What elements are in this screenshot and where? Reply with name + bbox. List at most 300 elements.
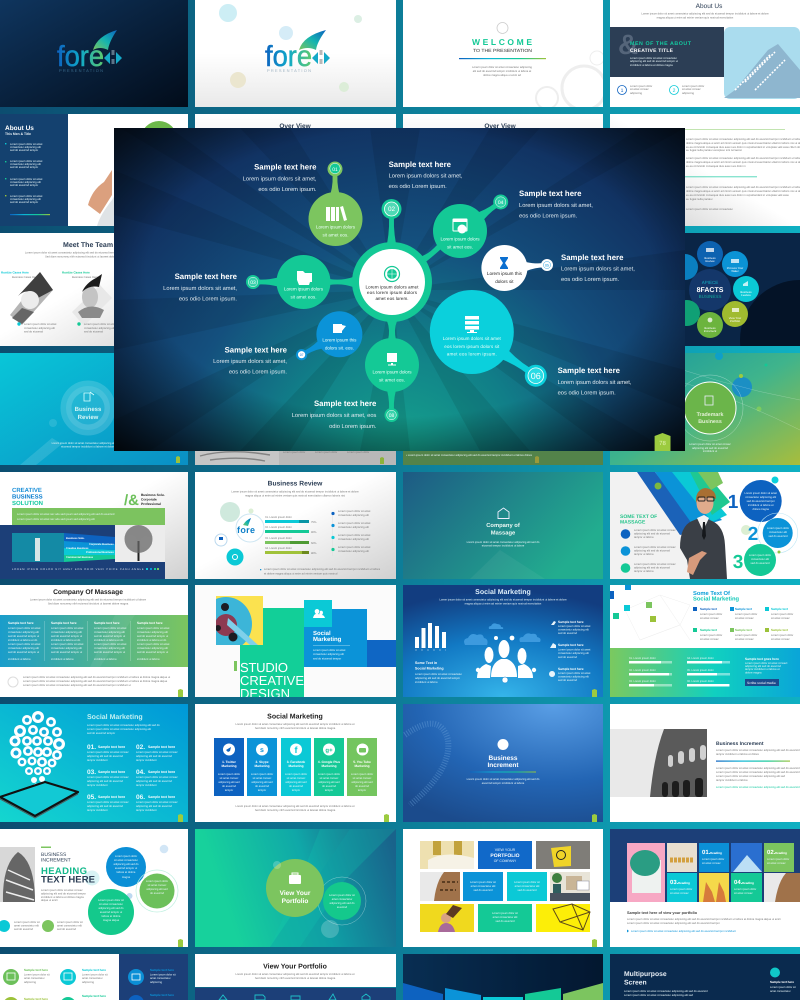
text: node 07: Lorem ipsum dolors sit amet, <box>213 358 287 365</box>
slide: sample text icons <box>0 954 188 1000</box>
slide: business review bars: Lorem ipsum dolor sit amet <box>338 534 371 537</box>
text: node 07 <box>213 346 288 376</box>
slide: multipurpose screen: amet consectetur <box>770 990 791 993</box>
slide: meet the team: Lorem ipsum dolor sit amet <box>24 323 57 326</box>
slide: creative business solution: Commercial Business <box>66 556 94 559</box>
slide: business increment cover: Increment <box>487 762 519 769</box>
slide: business review bars: Lorem ipsum dolor sit amet <box>338 522 371 525</box>
slide: company of massage columns: Lorem ipsum dolor sit amet <box>51 643 84 646</box>
slide: forex white logo <box>195 0 396 107</box>
slide: portfolio tiles: Lorem ipsum dolor <box>670 888 692 891</box>
slide: creative business solution: LOREM IPSUM DOLOR SIT AMET EOS ODIO VERI PRICE CASH ANGLE <box>12 568 144 571</box>
slide: social marketing balloon: tempor incididunt <box>87 809 108 812</box>
slide: sample text icons: Sample text here <box>82 968 106 972</box>
slide: about us with building: & <box>618 29 638 60</box>
slide: social marketing cards: Lorem ipsum dolor <box>285 773 307 776</box>
slide: meet the team: consectetur adipiscing elit <box>24 327 55 330</box>
slide: forex white logo: fore <box>265 41 312 73</box>
slide: sample text icons: Sample text here <box>82 994 106 998</box>
slide: about us with person: About Us <box>5 125 34 132</box>
slide: social marketing cards: sit amet consec <box>253 777 272 780</box>
slide: social marketing cards: sit amet consec <box>353 777 372 780</box>
slide: view your portfolio cover: amet consectetur <box>332 898 352 901</box>
slide: text page <box>610 114 800 226</box>
text: node 01 <box>243 162 317 193</box>
slide: company of massage columns: Lorem ipsum dolor sit amet <box>51 627 84 630</box>
slide: business review bars: Lorem ipsum dolor sit amet <box>338 510 371 513</box>
slide: sample text icons: adipiscing <box>24 981 36 984</box>
slide: creative business solution: CREATIVE <box>12 487 42 494</box>
text: node 05 <box>561 253 635 283</box>
slide: portfolio grid: amet consectetur elit <box>515 885 540 888</box>
slide: view your portfolio cover: View Your <box>280 890 311 897</box>
slide: creative business solution: Business Solu. <box>141 493 165 497</box>
slide: trademark business <box>610 353 800 465</box>
node 05: white circle <box>481 245 553 291</box>
text: node 03: Sample text here <box>175 272 238 281</box>
text: node 06 <box>558 366 632 396</box>
slide: company of massage columns: sed do eiusmod tempor ut <box>8 651 39 654</box>
slide: business review bars: magna aliqua ut enim ad minim veniam quis nostrud exercitation ullamco laboris nisi <box>245 494 345 498</box>
photo: water <box>12 533 64 562</box>
slide: view your portfolio icons: View Your Portfolio <box>263 962 327 970</box>
slide: portfolio tiles: 01. <box>702 849 711 856</box>
node 06: large cyan circle: 06 <box>531 371 541 381</box>
slide: social marketing cards: Lorem ipsum dolor sit amet consectetur adipiscing elit sed do eiusmod tempor incididunt ut labore et <box>235 805 355 808</box>
node 07: blue circle <box>296 311 362 360</box>
slide: company of massage columns: consectetur adipiscing elit <box>8 631 39 634</box>
slide: social marketing cards: tempor <box>358 789 366 792</box>
slide: social marketing blue: Lorem ipsum dolor sit amet <box>558 672 591 675</box>
node 05: white circle: dolors sit <box>495 279 514 284</box>
slide: some text of massage with man: MASSAGE <box>620 520 646 526</box>
slide: company of massage columns: sed do eiusmod tempor ut <box>94 651 125 654</box>
slide: portfolio tiles: Heading <box>678 881 690 885</box>
slide: heading text here: sed do eiusmod <box>57 928 76 931</box>
slide: 8 facts business: Increment <box>704 329 716 333</box>
node 07: blue circle: dolors sit. eos. <box>325 346 354 350</box>
slide: meet the team: Rostize Cases Here <box>62 270 90 274</box>
slide: heading text here: Lorem ipsum dolor <box>146 880 168 883</box>
slide: heading text here: magna <box>122 876 131 879</box>
slide: some text of social marketing: sit amet consec <box>771 638 790 641</box>
icon: web window <box>453 219 467 234</box>
slide: creative business solution: Creative Business <box>66 547 89 550</box>
node 04: teal circle: sit amet eos. <box>447 244 473 250</box>
slide: heading text here: adipiscing elit sed do <box>114 863 139 866</box>
node 04: teal circle <box>419 194 508 264</box>
slide: social marketing blue: Sample text here <box>558 620 584 624</box>
slide: company of massage columns: Lorem ipsum dolor sit amet consectetur adipiscing elit sed do eiusmod tempor incididunt ut labore et dolore magna aliqua ut <box>23 676 170 679</box>
text: node 05: eos odio Lorem ipsum. <box>561 276 620 283</box>
slide: creative business solution: BUSINESS <box>12 494 43 500</box>
slide: social marketing balloon: tempor incididunt <box>136 809 157 812</box>
slide: social marketing cards: do eiusmod <box>322 785 336 788</box>
slide: business review bars: Business Review <box>268 480 323 488</box>
slide: social marketing balloon: Sample text here <box>98 795 125 799</box>
slide: heading text here: do eiusmod <box>150 892 164 895</box>
slide: heading text here: adipiscing elit sed <box>146 888 168 891</box>
slide: creative business solution <box>0 472 188 579</box>
slide: view your portfolio icons <box>195 954 396 1000</box>
icon: server <box>465 316 479 333</box>
slide: view your portfolio icons: Sed diam nonummy nibh euismod tincidunt ut laoreet dolore magna <box>255 977 336 980</box>
slide: sample text icons: Sample text here <box>150 968 174 972</box>
slide: meet the team: sed do eiusmod <box>24 330 43 334</box>
slide: company of massage columns: incididunt ut labore <box>51 658 74 661</box>
slide: social marketing cards: Sed diam nonummy nibh euismod tincidunt ut laoreet dolore magna <box>255 727 336 730</box>
slide: meet the team: sed do eiusmod <box>84 330 103 334</box>
chart: progress bars: 90% <box>311 531 317 534</box>
text: node 07: Sample text here <box>225 346 288 354</box>
slide: social marketing blue: incididunt ut labore <box>415 681 438 684</box>
slide: some text of massage with man: Lorem ipsum dolor sit amet consec <box>634 529 676 532</box>
slide: social marketing balloon: tempor incididunt <box>87 759 108 762</box>
slide: 8 facts business: Review <box>705 259 716 263</box>
slide: studio creative design: CREATIVE <box>240 673 304 688</box>
slide: portfolio grid: Lorem ipsum dolor sit <box>470 881 496 884</box>
slide: social marketing blue: Social Marketing <box>415 666 444 670</box>
slide: portfolio tiles: sit amet consec <box>702 862 721 865</box>
slide: social marketing balloon: adipiscing elit sed do eiusmod <box>87 755 123 758</box>
slide: some text of massage with man: sed do eiusmod tempor <box>747 500 775 503</box>
slide: some text of social marketing: dolore magna <box>745 672 762 674</box>
slide: company of massage columns: Lorem ipsum dolor sit amet consectetur adipiscing elit sed do eiusmod tempor incididunt ut <box>23 684 131 687</box>
slide: social marketing blue: sed do eiusmod <box>558 656 577 659</box>
node 06: large cyan circle <box>430 290 547 387</box>
slide: social marketing cards: adipiscing elit sed <box>285 781 307 784</box>
slide: forex dark logo: PRESENTATION <box>59 68 103 73</box>
slide: meet the team: Rostize Cases Here <box>1 270 29 274</box>
slide: company of massage columns: Lorem ipsum dolor sit amet <box>8 627 41 630</box>
slide: some text of social marketing: Sample text goes here <box>745 657 779 661</box>
slide: social marketing blue: Lorem ipsum dolor sit amet <box>558 648 591 652</box>
slide: about us with person: Lorem ipsum dolor sit amet <box>10 143 43 146</box>
slide: portfolio tiles: 04. <box>734 879 743 886</box>
slide: multipurpose screen: Screen <box>624 980 647 986</box>
slide: social marketing cards: tempor <box>292 789 300 792</box>
node 06: large cyan circle: eos lorem ipsum dolors sit <box>444 344 500 349</box>
slide: social marketing cards: adipiscing elit sed <box>251 781 273 784</box>
chart: white progress bars: 02. Lorem ipsum dolor <box>629 669 656 672</box>
slide: view your portfolio cover: Portfolio <box>282 898 308 905</box>
slide: portfolio tiles: Lorem ipsum dolor sit amet consectetur adipiscing elit sed do eiusmod tempor incididunt <box>631 930 736 933</box>
slide: sample text icons: Lorem ipsum dolor sit <box>150 974 176 976</box>
photo: desk <box>550 872 590 901</box>
slide: some text of social marketing: Lorem ipsum dolor <box>771 613 793 616</box>
slide: company of massage columns: consectetur adipiscing elit <box>51 647 82 650</box>
slide: company of massage columns: consectetur adipiscing elit <box>137 647 168 650</box>
slide: some text of massage with man: incididunt ut labore et <box>748 504 774 507</box>
icon: users <box>313 609 325 618</box>
slide: social marketing balloon: Lorem ipsum dolor sit amet consectetur adipiscing elit <box>87 728 151 731</box>
slide: about us with building: Lorem ipsum dolor sit amet consectetur adipiscing elit sed do eiusmod tempor incididunt ut labore et dolore <box>641 12 769 16</box>
slide: social marketing blue: adipiscing elit sed do eiusmod tempor <box>415 677 460 680</box>
slide: welcome: TO THE PRESENTATION <box>473 48 532 53</box>
slide: social marketing cards: 5. You Tube <box>353 760 371 764</box>
slide: company of massage columns: consectetur adipiscing elit <box>137 631 168 634</box>
slide: 8 facts business <box>685 233 800 346</box>
photo: man in cardigan <box>680 488 727 579</box>
slide: business increment colosseum: tempor incididunt ut labore <box>716 779 748 782</box>
slide: about us with building: Lorem ipsum dolor <box>630 85 652 88</box>
slide: heading text here: sit amet consectetur <box>99 903 123 906</box>
slide: some text of massage with man: consectetur elit <box>751 558 769 561</box>
slide: hidden green page: ▪ Lorem ipsum dolor sit amet consectetur adipiscing elit sed do eiusmod tempor incididunt ut labore dolore <box>406 454 532 457</box>
slide: company of massage cover <box>403 472 603 579</box>
slide: business increment cover <box>403 704 603 822</box>
slide: social marketing balloon: Lorem ipsum dolor sit amet consec <box>136 751 178 754</box>
slide: portfolio tiles: Lorem ipsum dolor sit amet consectetur adipiscing elit sed do eiusmod tempor incididunt ut labore et dolore magna aliqua ut enim <box>627 918 781 921</box>
slide: heading text here: Lorem ipsum dolor sit amet consec <box>41 889 83 892</box>
photo: colosseum <box>650 729 707 797</box>
slide: studio creative design: Lorem ipsum dolor sit amet <box>313 649 346 652</box>
slide: 8 facts business: Portfolio <box>730 319 741 323</box>
text: node 03 <box>163 272 238 302</box>
slide: forex dark logo: fore <box>57 41 104 73</box>
slide: portfolio grid: VIEW YOUR <box>495 848 516 852</box>
slide: text page: ex ea commodo consequat duis aute irure dolor in <box>686 165 746 168</box>
slide: company of massage columns: consectetur adipiscing elit <box>94 631 125 634</box>
slide: welcome: dolore magna aliqua ut enim ad <box>483 74 521 77</box>
slide: social marketing cards: 2. Skype <box>256 760 269 764</box>
slide: social marketing cards: Marketing <box>254 764 270 768</box>
slide: social marketing balloon: adipiscing elit sed do eiusmod <box>87 805 123 808</box>
slide: company of massage columns: Sample text here <box>137 621 163 625</box>
slide: social marketing cards: 4. Google Plus <box>318 760 340 764</box>
chart: progress bars: 01. Lorem ipsum dolor <box>265 516 292 519</box>
slide: business review bars: Lorem ipsum dolor sit amet consectetur adipiscing elit sed do eiusmod tempor incididunt ut labore et dolore <box>231 490 359 494</box>
slide: portfolio grid: sed do eiusmod <box>474 889 493 892</box>
photo: colosseum crop <box>420 872 460 901</box>
slide: social marketing blue: Sample text here <box>558 643 584 647</box>
slide: some text of social marketing: sit amet consec <box>735 617 754 620</box>
slide: 8 facts business: BUSINESS <box>699 294 721 299</box>
slide: heading text here: sit amet consectetur <box>114 859 138 862</box>
slide: social marketing balloon: adipiscing elit sed do eiusmod <box>87 780 123 783</box>
slide: business review magnifier: Lorem ipsum dolor sit amet consectetur adipiscing elit sed do <box>52 442 125 445</box>
slide: about us with person: consectetur adipiscing elit <box>10 198 41 201</box>
slide: company of massage cover: Lorem ipsum dolor sit amet consectetur adipiscing elit sed do <box>467 541 540 544</box>
icon: social balloon <box>10 711 65 798</box>
slide: portfolio grid: OF COMPANY <box>494 859 517 863</box>
slide: sample text icons: amet consectetur <box>150 977 171 980</box>
slide: heading text here: aliqua ut enim <box>41 899 58 902</box>
slide: portfolio tiles <box>610 829 800 947</box>
slide: about us with person: Lorem ipsum dolor sit amet <box>10 195 43 198</box>
slide: business review bars: consectetur adipiscing elit <box>338 550 369 553</box>
slide: social marketing cards: g+ <box>325 748 333 754</box>
slide: company of massage columns: sed do eiusmod tempor ut <box>137 635 168 638</box>
slide: company of massage columns: Lorem ipsum dolor sit amet <box>94 627 127 630</box>
slide: sample text icons: Sample text here <box>24 968 48 972</box>
slide: some text of social marketing: Some Text Of <box>693 590 730 597</box>
slide: business review bars: consectetur adipiscing elit <box>338 538 369 541</box>
slide: about us with building: sit amet consec <box>630 88 649 91</box>
chart: progress bars: 60% <box>311 542 317 545</box>
photo: girl yellow field <box>420 904 474 932</box>
slide: business review magnifier: Business <box>75 406 102 413</box>
node 01: green circle: sit amet eos. <box>322 232 349 238</box>
text: node 06: Sample text here <box>558 366 621 375</box>
slide: multipurpose screen <box>610 954 800 1000</box>
slide: some text of massage with man: consectetur elit <box>769 531 787 534</box>
slide: some text of social marketing: Lorem ipsum dolor <box>700 613 722 616</box>
slide: view your portfolio cover: Lorem ipsum dolor sit <box>329 894 355 897</box>
page number tag: 78 <box>659 440 666 447</box>
slide: social marketing balloon: Sample text here <box>148 795 175 799</box>
slide: studio creative design: DESIGN <box>240 686 290 701</box>
text: node 02: Lorem ipsum dolors sit amet, <box>389 172 463 180</box>
slide: heading text here: sed do eiusmod <box>14 928 33 931</box>
slide: some text of massage with man: sed do eiusmod <box>769 535 788 538</box>
slide: social marketing cards: 3. Facebook <box>287 760 305 764</box>
slide: social marketing blue: Lorem ipsum dolor sit amet consectetur <box>415 673 462 676</box>
slide: some text of massage with man: Lorem ipsum dolor sit amet <box>744 492 777 495</box>
slide: heading text here: sit amet consec <box>148 884 167 887</box>
slide: heading text here: Lorem ipsum dolor <box>115 855 137 858</box>
slide: creative business solution: Lorem ipsum dolor sit amet nec adu sed ipsum sed adipiscing elit <box>17 518 95 521</box>
slide: about us with person: This Men & Title <box>5 132 31 136</box>
slide: heading text here: adipiscing elit sed do eiusmod tempor <box>41 892 86 896</box>
slide: hidden map page <box>195 451 396 465</box>
slide: portfolio grid <box>403 829 603 947</box>
text: node 06: Lorem ipsum dolors sit amet, <box>558 379 632 386</box>
slide: about us with person: Lorem ipsum dolor sit amet <box>10 160 43 163</box>
slide: portfolio grid: amet consectetur elit <box>493 916 518 919</box>
slide: company of massage cover: Massage <box>491 530 516 536</box>
slide: studio creative design: Marketing <box>313 636 342 643</box>
slide: heading text here <box>0 829 188 947</box>
slide: heading text here: eiusmod tempor ut <box>100 911 122 914</box>
photo: team member two <box>72 274 112 326</box>
slide: social marketing cards: do eiusmod <box>222 785 236 788</box>
text: node 01: Lorem ipsum dolors sit amet, <box>243 176 317 182</box>
slide: about us with person: consectetur adipiscing elit <box>10 146 41 149</box>
slide: business review magnifier <box>0 353 188 465</box>
slide: business increment cover: Lorem ipsum dolor sit amet consectetur adipiscing elit sed do <box>467 778 540 781</box>
slide: company of massage columns: consectetur adipiscing elit <box>51 631 82 634</box>
slide: social marketing balloon: Lorem ipsum dolor sit amet consec <box>136 776 178 779</box>
photo: pink paper clips <box>627 843 665 902</box>
slide: social marketing cards: do eiusmod <box>355 785 369 788</box>
slide: dark colored shapes <box>403 954 603 1000</box>
text: node 08: Lorem ipsum dolors sit amet, eos <box>292 412 377 419</box>
slide: social marketing cards: s <box>260 747 264 754</box>
slide: some text of massage with man: tempor ut labore <box>634 536 654 539</box>
photo: salad plate <box>216 596 263 645</box>
slide: some text of social marketing: Lorem ipsum dolor <box>771 634 793 637</box>
slide: 8 facts business: Feature <box>741 293 751 297</box>
slide: some text of social marketing: Sample text <box>735 628 752 632</box>
slide: company of massage columns: Company Of Massage <box>53 589 123 596</box>
slide: some text of massage with man: tempor ut labore <box>634 553 654 556</box>
slide: social marketing balloon: adipiscing elit sed do eiusmod <box>136 805 172 808</box>
slide: view your portfolio cover <box>195 829 396 947</box>
slide: some text of massage with man: consectetur adipiscing elit <box>745 496 776 499</box>
icon: tablet <box>0 782 78 818</box>
slide: sample text icons: Lorem ipsum dolor sit <box>24 974 50 976</box>
slide: creative business solution: Lorem ipsum dolor sit amet nec adu sed ipsum sed adipiscing elit sed do eiusmod <box>17 513 115 516</box>
slide: social marketing blue: magna aliqua ut enim ad minim veniam quis nostrud exercitation <box>465 602 542 606</box>
slide: meet the team: Lorem ipsum dolor sit amet <box>84 323 117 326</box>
slide: creative business solution: Professional <box>141 502 161 506</box>
slide: social marketing balloon: sed do eiusmod tempor <box>87 732 115 735</box>
slide: 8 facts business: APIECE <box>702 280 718 285</box>
slide: some text of massage with man: adipiscing elit sed do eiusmod <box>634 532 670 536</box>
slide: social marketing balloon: Lorem ipsum dolor sit amet consec <box>136 801 178 804</box>
slide: portfolio grid: sed do eiusmod <box>518 889 537 892</box>
slide: 8 facts business: Water <box>731 269 739 273</box>
slide: portfolio grid: amet consectetur elit <box>471 885 496 888</box>
slide: about us with building: 1 <box>621 88 624 94</box>
slide: some text of social marketing: Sample text <box>700 607 717 611</box>
slide: some text of social marketing: Sample text <box>771 628 788 632</box>
slide: about us with building: magna aliqua ut enim ad minim veniam quis nostrud exercitation <box>657 16 734 20</box>
slide: social marketing cards: do eiusmod <box>255 785 269 788</box>
slide: heading text here: TEXT HERE <box>41 874 95 886</box>
icon: monitor <box>387 353 397 366</box>
node 04: teal circle: Lorem ipsum dolors <box>440 236 480 242</box>
slide: 8 facts business: Business <box>740 290 752 294</box>
slide: some text of social marketing: Sample text <box>771 607 788 611</box>
slide: social marketing balloon: Lorem ipsum dolor sit amet consec <box>87 751 129 754</box>
chart: progress bars: 80% <box>311 552 317 555</box>
slide: portfolio tiles: sit amet consec <box>767 862 786 865</box>
text: node 02: eos odio Lorem ipsum. <box>389 183 447 190</box>
central hub: amet eos lorem. <box>376 296 408 301</box>
slide: social marketing cards: Marketing <box>288 764 304 768</box>
slide: social marketing cards: tempor <box>325 789 333 792</box>
slide: welcome: WELCOME <box>472 37 532 47</box>
slide: company of massage columns: incididunt ut labore et do <box>8 639 38 642</box>
slide: trademark business: Lorem ipsum dolor sit amet consec <box>689 443 731 446</box>
slide: about us with building: adipiscing elit sed do eiusmod tempor ut <box>630 60 678 63</box>
slide: over view 1 <box>195 114 396 130</box>
slide: company of massage columns: incididunt ut labore <box>137 658 160 661</box>
slide: social marketing cards: Lorem ipsum dolor <box>318 773 340 776</box>
slide: over view 2: Over View <box>484 123 517 130</box>
slide: studio creative design: STUDIO <box>240 660 288 675</box>
slide: multipurpose screen: Lorem ipsum dolor sit amet consectetur adipiscing elit sed <box>624 994 694 997</box>
text: node 04: Sample text here <box>519 189 582 198</box>
slide: about us with building: incididunt ut labore et dolore magna <box>630 64 673 67</box>
slide: trademark business: incididunt ut <box>703 450 717 453</box>
slide: text page: eu fugiat nulla pariatur <box>686 198 713 201</box>
text: node 04 <box>519 189 593 220</box>
slide: company of massage columns: incididunt ut labore et do <box>51 639 81 642</box>
slide: social marketing blue: sed do eiusmod <box>558 632 577 635</box>
slide: business increment colosseum <box>610 704 800 822</box>
slide: some text of social marketing: Lorem ipsum dolor <box>735 634 757 637</box>
text: node 02: Sample text here <box>389 160 452 169</box>
central hub: eos lorem ipsum dolors <box>367 290 418 295</box>
slide: social marketing blue <box>403 585 603 697</box>
photo: bare tree <box>124 525 152 561</box>
slide: about us with person: consectetur adipiscing elit <box>10 181 41 184</box>
slide: 8 facts business: Process Your <box>727 266 743 270</box>
slide: some text of social marketing: Lorem ipsum dolor <box>735 613 757 616</box>
slide: portfolio tiles: Heading <box>775 851 787 855</box>
slide: some text of massage with man: adipiscing elit sed do eiusmod <box>634 566 670 570</box>
node 01: green circle <box>308 162 362 246</box>
slide: social marketing cards: Marketing <box>354 764 370 768</box>
slide: hidden map page: Lorem ipsum dolor <box>315 451 337 454</box>
slide: portfolio tiles: sit amet consec <box>734 892 753 895</box>
slide: company of massage cover: eiusmod tempor incididunt ut labore <box>482 544 525 548</box>
node 06: large cyan circle: Lorem ipsum dolors sit amet <box>443 336 502 341</box>
slide: meet the team: Lorem ipsum dolor sit amet consectetur adipiscing elit sed do eiusmod tempor <box>25 252 118 254</box>
